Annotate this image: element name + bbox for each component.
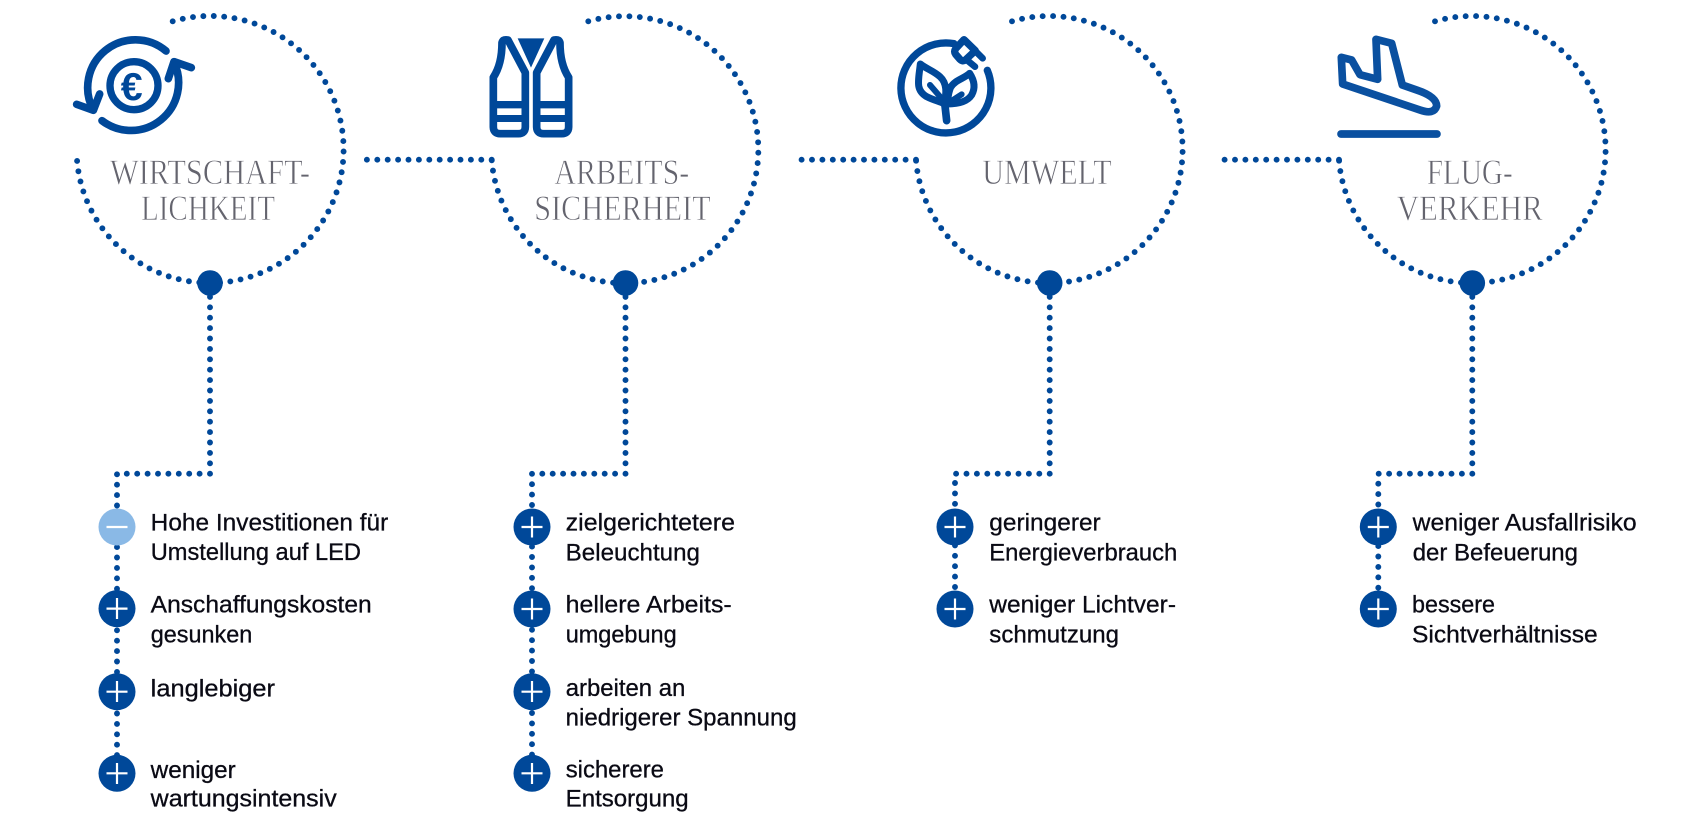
list item: sicherere Entsorgung: Entsorgung [566, 786, 689, 813]
panel: Flugverkehr [1339, 16, 1637, 649]
list item: weniger wartungsintensiv: wartungsintensiv [150, 786, 337, 813]
connector line to list [1378, 283, 1472, 609]
list item: Anschaffungskosten: gesunken [151, 622, 252, 649]
list item: Anschaffungskosten [98, 590, 372, 649]
icon: plant with plug [901, 40, 991, 133]
connector: 2 to 3 [794, 157, 916, 163]
list item: bessere Sichtverhältnisse: Sichtverhältnisse [1412, 622, 1598, 649]
heading: WIRTSCHAFT- [110, 152, 310, 192]
list item: Anschaffungskosten: Anschaffungskosten [151, 592, 372, 619]
node [613, 270, 638, 296]
list item: Hohe Investitionen [98, 508, 388, 566]
list item: zielgerichtetere [514, 508, 735, 567]
list item: geringerer Energieverbrauch: Energieverbrauch [989, 540, 1177, 567]
list item: weniger Ausfallrisiko: weniger Ausfallrisiko [1412, 510, 1637, 536]
dotted circle [916, 16, 1183, 283]
heading: VERKEHR [1397, 188, 1543, 228]
heading: UMWELT [982, 152, 1112, 192]
list item: arbeiten an niedrigerer Spannung: arbeiten an [566, 675, 685, 702]
list item: arbeiten an niedrigerer Spannung: niedrigerer Spannung [566, 705, 797, 732]
list item: langlebiger: langlebiger [151, 676, 275, 703]
list item: Hohe Investitionen: Umstellung auf LED [151, 539, 361, 566]
list item: geringerer Energieverbrauch: geringerer [989, 510, 1101, 536]
panel: Umwelt [901, 16, 1183, 649]
node [1037, 270, 1062, 296]
list item: Hohe Investitionen: Hohe Investitionen für [151, 510, 388, 537]
heading: ARBEITS- [554, 152, 689, 192]
list item: weniger Ausfallrisiko: der Befeuerung [1413, 540, 1578, 567]
dotted circle [492, 16, 758, 283]
list item: weniger wartungsintensiv: weniger [150, 757, 236, 784]
list item: weniger Ausfallrisiko [1360, 508, 1637, 567]
panel: Arbeitssicherheit [492, 16, 797, 813]
connector: 1 to 2 [362, 157, 492, 163]
list item: zielgerichtetere: zielgerichtetere [566, 510, 735, 536]
heading: LICHKEIT [141, 188, 275, 228]
list item: weniger Lichtverschmutzung: weniger Lichtver- [988, 592, 1176, 619]
list item: bessere Sichtverhältnisse [1360, 590, 1598, 649]
heading [1397, 152, 1543, 228]
dotted circle [1339, 16, 1606, 283]
connector line to list [955, 283, 1050, 609]
list item: zielgerichtetere: Beleuchtung [566, 540, 700, 567]
list item: weniger Lichtverschmutzung [936, 590, 1176, 649]
heading: FLUG- [1427, 152, 1513, 192]
icon: euro cycle [77, 40, 191, 130]
panel: Wirtschaftlichkeit [77, 16, 388, 813]
list item: bessere Sichtverhältnisse: bessere [1412, 592, 1495, 619]
list item: sicherere Entsorgung: sicherere [566, 756, 664, 783]
list item: hellere Arbeitsumgebung [514, 590, 732, 649]
list item: geringerer Energieverbrauch [936, 508, 1177, 567]
connector line to list [532, 283, 626, 773]
heading [110, 152, 310, 228]
node [1460, 270, 1485, 296]
node [197, 270, 223, 296]
list item: langlebiger [98, 673, 275, 710]
list item: weniger wartungsintensiv [98, 755, 337, 813]
connector: 3 to 4 [1217, 157, 1339, 163]
list item: sicherere Entsorgung [514, 755, 689, 813]
list item: arbeiten an niedrigerer Spannung [514, 673, 797, 732]
connector line to list [117, 283, 210, 773]
list item: hellere Arbeitsumgebung: umgebung [566, 622, 677, 649]
heading [534, 152, 711, 228]
icon: landing plane [1341, 39, 1437, 134]
icon: euro cycle: € [121, 65, 143, 109]
dotted circle [77, 16, 344, 283]
icon: safety vest [493, 38, 569, 134]
list item: weniger Lichtverschmutzung: schmutzung [989, 622, 1119, 649]
heading: SICHERHEIT [534, 188, 711, 228]
list item: hellere Arbeitsumgebung: hellere Arbeits- [566, 592, 732, 619]
